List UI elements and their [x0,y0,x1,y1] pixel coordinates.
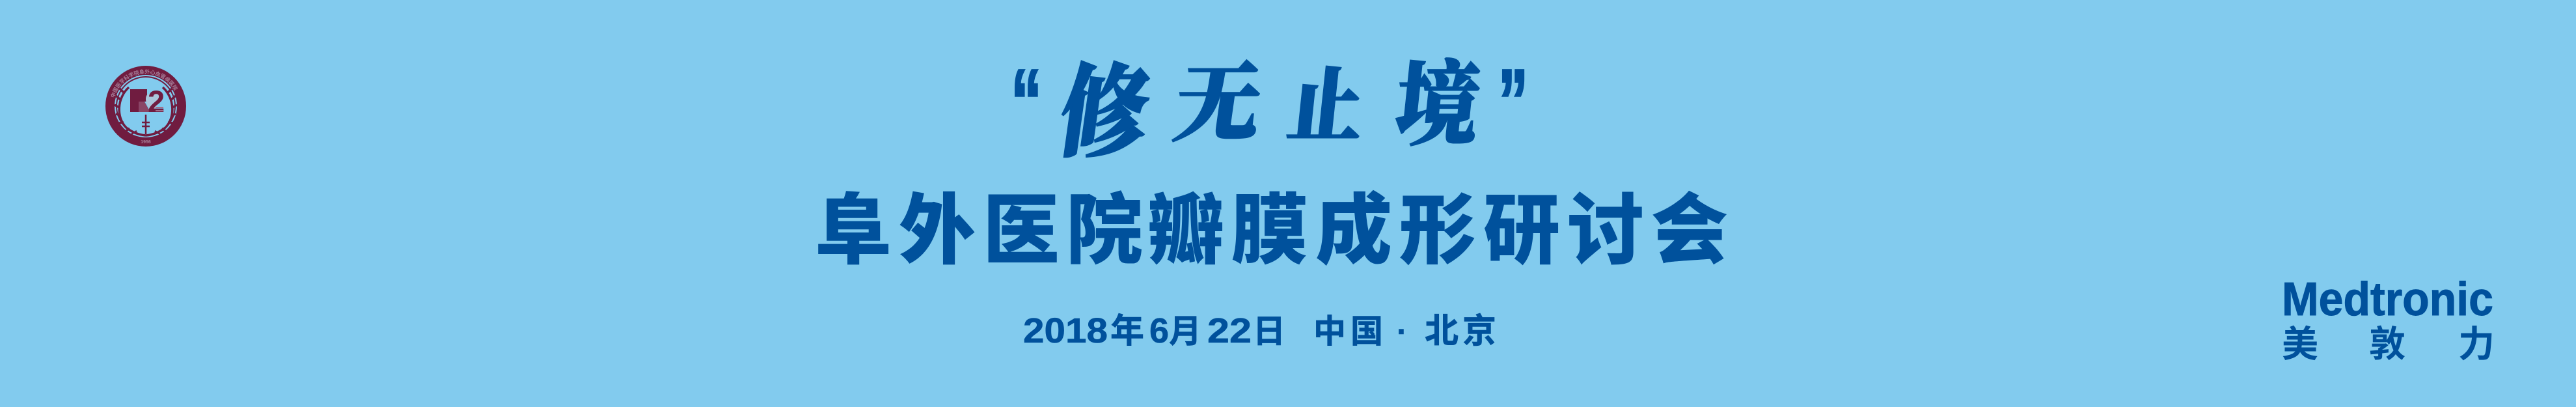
text: date and location: 年 [1110,313,1144,350]
F2 emblem: 2 [148,84,165,119]
text: date and location: · [1397,313,1408,350]
Chinese brand name: 力 [2458,324,2495,365]
text: date and location: 京 [1462,313,1496,350]
Chinese brand name [2282,324,2495,365]
character 止: 止 [1283,42,1370,158]
left quotation mark: “ [1011,50,1042,152]
icon: Fuwai hospital round seal [105,66,186,147]
seal ring lettering: 1956 [141,140,151,145]
text: date and location: 22 [1207,311,1252,350]
seal ring lettering [111,69,178,145]
staff symbol [131,115,160,134]
text: date and location [1023,311,1496,350]
heading: calligraphic slogan [1011,32,1528,176]
text: date and location: 国 [1350,313,1383,350]
text: date and location: 月 [1169,313,1201,350]
text: date and location: 中 [1313,313,1346,350]
seal ring lettering: 中国医学科学院阜外心血管病医院 [111,69,178,98]
logo: Medtronic wordmark [2282,274,2495,365]
left wreath [115,87,146,135]
text: date and location: 2018 [1023,311,1108,350]
character 无: 无 [1168,35,1270,158]
character 修: 修 [1053,32,1160,176]
heading: seminar title: 阜外医院瓣膜成形研讨会 [815,188,1728,274]
Medtronic latin name: Medtronic [2282,274,2493,326]
text: date and location: 6 [1149,311,1169,350]
text: date and location: 北 [1425,313,1459,350]
Chinese brand name: 敦 [2369,324,2405,365]
right quotation mark: ” [1498,50,1528,152]
right wreath [146,87,177,135]
text: date and location: 日 [1253,313,1285,350]
Chinese brand name: 美 [2282,324,2318,365]
character 境: 境 [1390,32,1487,163]
